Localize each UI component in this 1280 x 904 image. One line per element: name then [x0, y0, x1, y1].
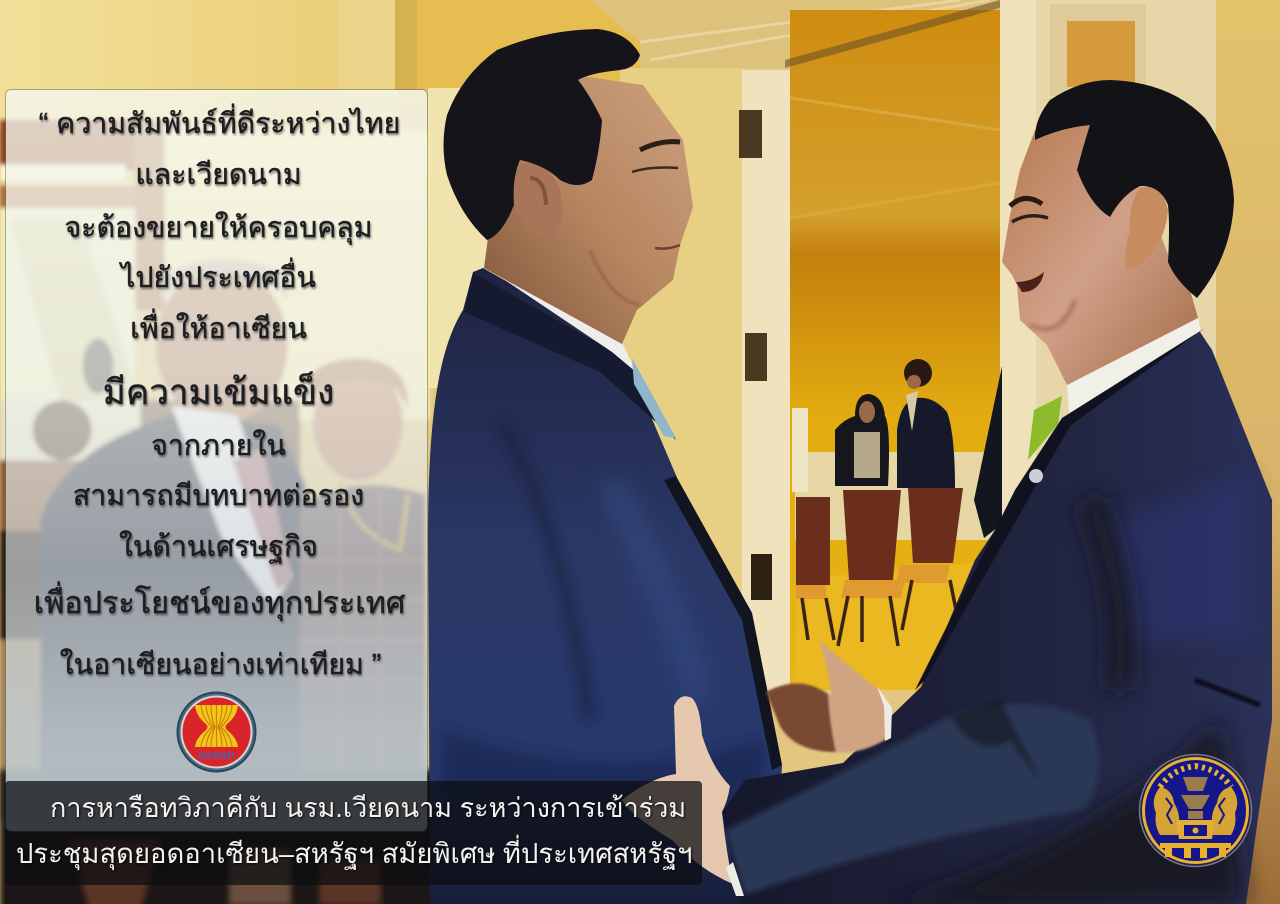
- left leader's shirt cuff: [877, 686, 892, 741]
- quote line 2: และเวียดนาม: [135, 159, 302, 191]
- left leader: hair: [444, 29, 640, 240]
- right leader: lapel, shirt and tie: [725, 318, 1260, 904]
- left leader: neck and face: [484, 75, 693, 344]
- quote line 3: จะต้องขยายให้ครอบคลุม: [64, 212, 373, 244]
- icon: ASEAN logo: asean: [198, 747, 235, 762]
- background: golden room with chairs and staff: [785, 0, 1005, 690]
- right leader: face and neck: [1002, 120, 1198, 385]
- caption bar: [5, 781, 702, 885]
- panel: quote background: [6, 90, 427, 831]
- quote line 4: ไปยังประเทศอื่น: [121, 262, 316, 294]
- cuff: [726, 862, 744, 896]
- quote line 5: เพื่อให้อาเซียน: [130, 313, 307, 345]
- left leader: ear: [513, 163, 562, 238]
- right leader: hair: [1035, 80, 1234, 298]
- background: right door frame: [974, 0, 1216, 560]
- left leader: lapel, shirt and tie: [440, 266, 782, 818]
- background: ceiling trim and door: [590, 0, 1000, 708]
- quote line 1: “ ความสัมพันธ์ที่ดีระหว่างไทย: [39, 108, 400, 140]
- quote text block: [34, 103, 407, 681]
- quote line 9: ในด้านเศรษฐกิจ: [119, 531, 318, 563]
- caption line 2: ประชุมสุดยอดอาเซียน–สหรัฐฯ สมัยพิเศษ ที่ประเทศสหรัฐฯ: [16, 838, 693, 869]
- right leader: suit: [722, 326, 1272, 904]
- handshake: right leader's hand: [766, 640, 889, 753]
- quote line 7: จากภายใน: [151, 430, 286, 462]
- background: dark lower-left foreground: [0, 770, 440, 904]
- quote line 6 emphasised: มีความเข้มแข็ง: [103, 373, 334, 412]
- quote line 10 emphasised: เพื่อประโยชน์ของทุกประเทศ: [34, 586, 405, 620]
- quote line 11: ในอาเซียนอย่างเท่าเทียม ”: [60, 649, 381, 681]
- icon: Thai government seal: [1138, 754, 1252, 868]
- caption text: [16, 793, 693, 871]
- right leader: eye, brow and mouth: [1010, 198, 1075, 329]
- background: left-side people, faint behind quote panel: [0, 120, 430, 825]
- icon: ASEAN logo: [176, 692, 256, 772]
- left hand on the sleeve: [622, 696, 733, 884]
- caption line 1: การหารือทวิภาคีกับ นรม.เวียดนาม ระหว่างการเข้าร่วม: [50, 793, 686, 823]
- left leader: eye, brow and mouth: [590, 142, 680, 305]
- quote line 8: สามารถมีบทบาทต่อรอง: [73, 480, 364, 512]
- right leader: ear: [1126, 186, 1168, 269]
- left leader: suit: [428, 268, 782, 904]
